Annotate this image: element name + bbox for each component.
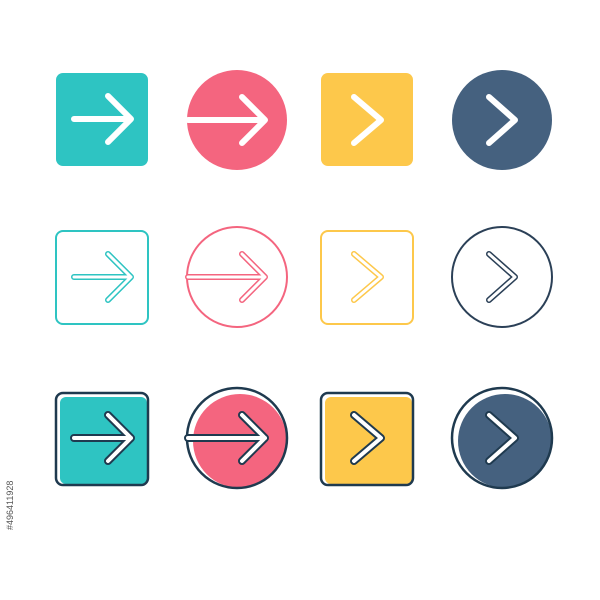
icon: yellow outlined filled square chevron [321,393,413,485]
icon: navy outline circle chevron [452,227,552,327]
icon: navy filled circle chevron [452,70,552,170]
icon: yellow outline square chevron [321,231,413,324]
icon: navy outlined filled circle chevron [452,388,552,488]
stock id text: #496411928 [5,481,15,530]
icon: pink outline circle arrow [187,227,287,327]
icon: pink outlined filled circle arrow [187,388,287,488]
icon: teal outlined filled square arrow [56,393,148,485]
icon: teal filled square arrow [56,73,148,166]
icon: pink filled circle arrow [187,70,287,170]
icon: teal outline square arrow [56,231,148,324]
icon: yellow filled square chevron [321,73,413,166]
